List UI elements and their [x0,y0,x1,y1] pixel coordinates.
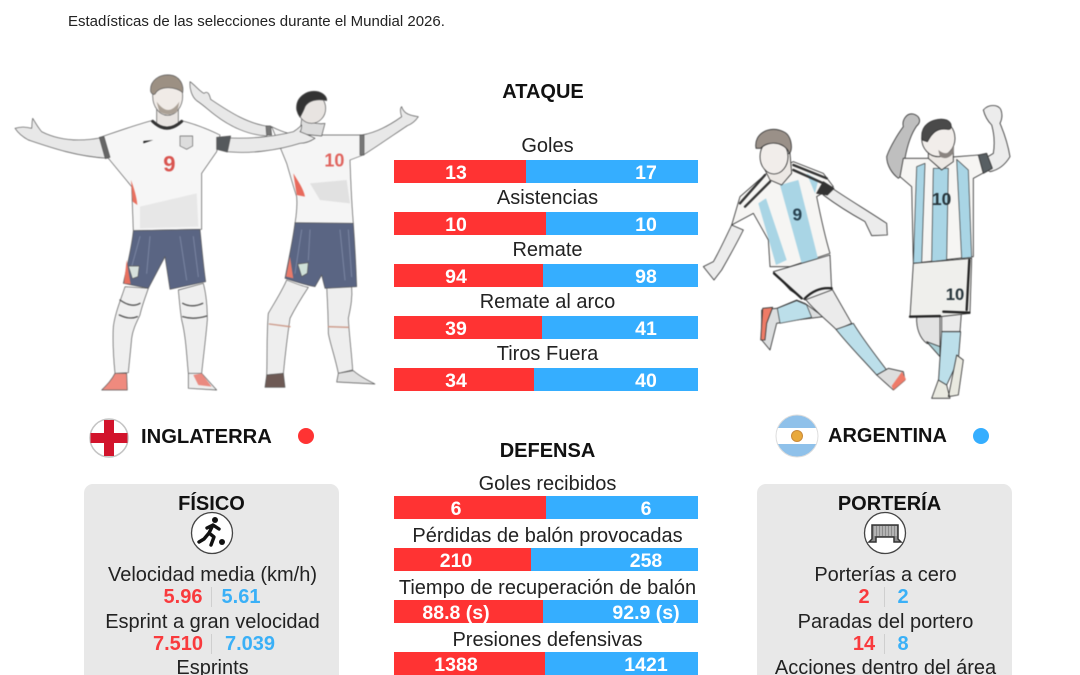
player: number 10 [190,82,418,387]
shirt and shorts numbers 10 [932,189,964,304]
heading: attack: ATAQUE [502,81,584,103]
value: Argentina speed: 5.61 [222,586,260,608]
row: shots off target [394,343,698,391]
shirt number 10: 10 [324,151,344,171]
team name: England: INGLATERRA [141,426,272,448]
value separator [884,587,885,607]
panel: goalkeeping [757,484,1012,675]
icon: Argentina flag [776,414,818,458]
row: shots: Remate [512,239,583,261]
legend dot: blue [973,428,989,444]
value: Argentina high speed sprint: 7.039 [225,633,275,655]
value: England saves: 14 [853,633,875,655]
row: goals: Goles [521,135,574,157]
heading: goalkeeping: PORTERÍA [838,493,941,515]
heading: physical: FÍSICO [178,493,245,515]
row: shots [394,239,698,287]
shirt and shorts numbers 10: 10 [946,285,964,304]
player: number 9 [703,129,906,390]
row: shots on target [394,291,698,339]
value separator [884,634,885,654]
icon: running player with ball [190,512,234,554]
stat label: goalkeeper saves: Paradas del portero [798,611,973,633]
panel: physical [84,484,339,675]
value: Argentina clean sheets: 2 [897,586,909,608]
value: England high speed sprint: 7.510 [153,633,203,655]
row: assists [394,187,698,235]
value: England speed: 5.96 [164,586,202,608]
legend dot: red [298,428,314,444]
stat label: clean sheets: Porterías a cero [814,564,957,586]
player: number 9 [15,75,315,390]
team: Argentina [776,414,989,458]
section: attack [394,81,698,391]
row: ball recovery time: Tiempo de recuperación de balón [399,577,696,599]
value: England clean sheets: 2 [858,586,870,608]
value separator [211,634,212,654]
shirt and shorts numbers 10: 10 [932,189,951,209]
illustration: England players [14,74,420,392]
value: Argentina saves: 8 [897,633,909,655]
row: shots on target: Remate al arco [480,291,615,313]
row: turnovers forced [394,525,698,571]
icon: England flag [89,418,129,458]
stat label: high speed sprint: Esprint a gran velocidad [105,611,320,633]
row: defensive pressures [394,629,698,675]
stat label: average speed: Velocidad media (km/h) [108,564,317,586]
player: number 10 [887,106,1010,398]
subtitle: Estadísticas de las selecciones durante el Mundial 2026. [68,13,445,30]
team: England [89,418,314,458]
row: shots off target: Tiros Fuera [497,343,598,365]
heading: defence: DEFENSA [500,440,595,462]
shirt number 9: 9 [163,152,175,177]
icon: goal [864,512,906,554]
row: goals conceded [394,473,698,519]
row: goals conceded: Goles recibidos [479,473,616,495]
team name: Argentina: ARGENTINA [828,425,947,447]
section: defence [394,440,698,675]
shirt number 9: 9 [793,205,802,225]
row: goals [394,135,698,183]
row: assists: Asistencias [497,187,598,209]
value separator [211,587,212,607]
row: defensive pressures: Presiones defensivas [452,629,643,651]
row: turnovers forced: Pérdidas de balón provocadas [412,525,683,547]
illustration: Argentina players [702,104,1012,400]
row: ball recovery time [394,577,698,623]
